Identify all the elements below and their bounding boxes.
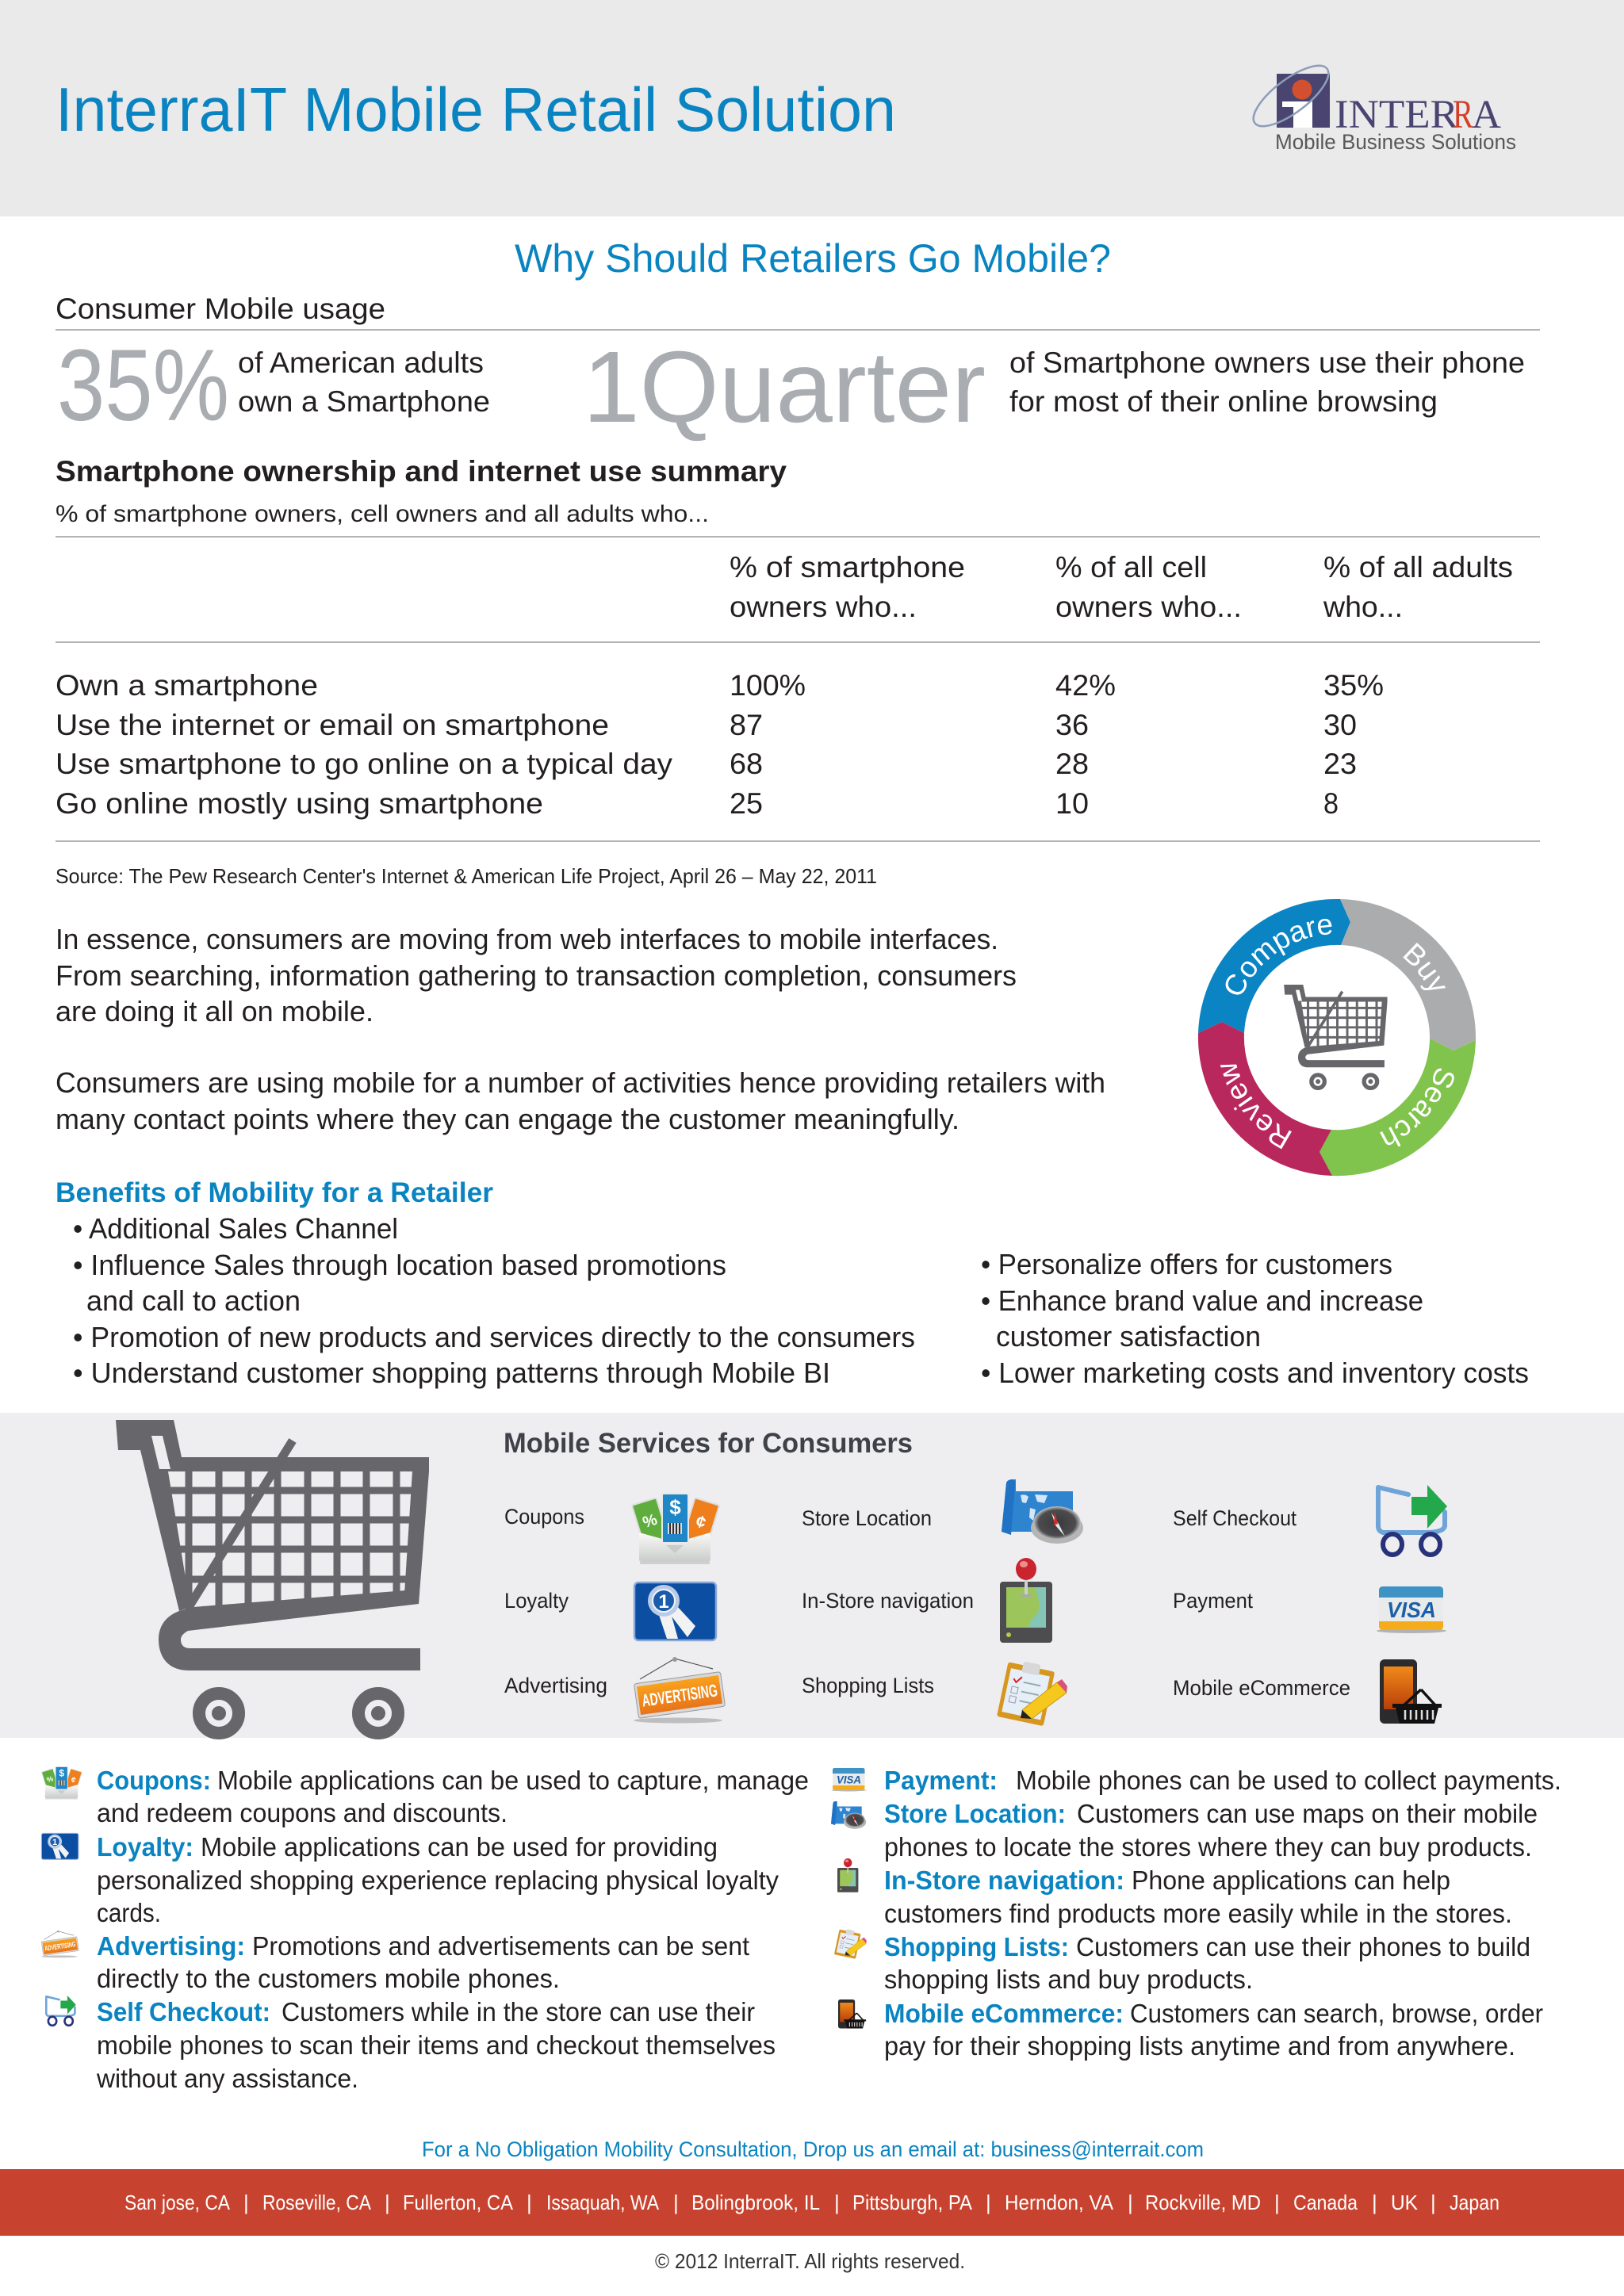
table rows: Use the internet or email on smartphone <box>56 709 609 741</box>
description: coupons: Coupons: <box>97 1766 211 1795</box>
description: mobile ecommerce: pay for their shopping lists anytime and from anywhere. <box>884 2031 1515 2061</box>
description: in-store navigation: Phone applications can help <box>1132 1866 1450 1895</box>
footer band: office locations: Japan <box>1450 2191 1500 2214</box>
table rows: 10 <box>1055 787 1089 820</box>
benefits list: left <box>73 1212 915 1389</box>
icon: cart in ring <box>1284 985 1388 1088</box>
service: advertising: Advertising <box>504 1674 607 1697</box>
footer band: office locations: | <box>1128 2191 1133 2214</box>
table rows: 30 <box>1323 709 1357 741</box>
table rows: 87 <box>730 709 763 741</box>
benefits list: left: • Understand customer shopping patterns through Mobile BI <box>73 1357 830 1389</box>
source note: Source: The Pew Research Center's Internet & American Life Project, April 26 – May 22, 2011 <box>56 864 877 888</box>
table rows: 28 <box>1055 748 1089 780</box>
description: advertising: Advertising: <box>97 1931 245 1961</box>
table rows: 8 <box>1323 787 1339 820</box>
description: store location <box>831 1799 1538 1862</box>
description: mobile ecommerce: Customers can search, browse, order <box>1130 1999 1543 2028</box>
description: store location: Customers can use maps on their mobile <box>1077 1799 1538 1828</box>
table rows <box>56 669 1384 820</box>
stat: 1 Quarter: of Smartphone owners use their phone <box>1009 346 1525 379</box>
stat: 35%: of American adults <box>238 346 484 379</box>
table heading: Smartphone ownership and internet use summary <box>56 455 787 488</box>
column headers: owners who... <box>730 591 917 623</box>
footer band: office locations: Bolingbrook, IL <box>691 2191 820 2214</box>
footer band: office locations: Roseville, CA <box>262 2191 372 2214</box>
service: loyalty: Loyalty <box>504 1589 569 1613</box>
column headers: % of smartphone <box>730 551 965 584</box>
service: advertising <box>504 1657 726 1724</box>
second paragraph <box>56 1066 1105 1135</box>
table subheading: % of smartphone owners, cell owners and all adults who... <box>56 501 709 527</box>
logo: Interra: R <box>1453 93 1473 137</box>
table rows: 36 <box>1055 709 1089 741</box>
footer band: office locations: | <box>673 2191 679 2214</box>
table rows: Use smartphone to go online on a typical day <box>56 748 673 780</box>
benefits list: left: • Influence Sales through location based promotions <box>73 1249 726 1281</box>
service: shopping lists: Shopping Lists <box>802 1674 934 1697</box>
benefits list: left: • Promotion of new products and services directly to the consumers <box>73 1321 915 1353</box>
segment: buy <box>1340 899 1476 1050</box>
icon: large shopping cart <box>116 1420 429 1733</box>
description: loyalty: cards. <box>97 1898 161 1927</box>
footer band: office locations: Canada <box>1293 2191 1358 2214</box>
table rows: Go online mostly using smartphone <box>56 787 543 820</box>
label: buy: Buy <box>1404 943 1446 990</box>
benefits list: left: • Additional Sales Channel <box>73 1212 398 1245</box>
benefits list: right <box>981 1248 1529 1389</box>
stat: 35%: 35% <box>57 329 229 442</box>
service: coupons: Coupons <box>504 1505 584 1529</box>
footer band: office locations: | <box>385 2191 390 2214</box>
service: self checkout: Self Checkout <box>1173 1506 1297 1530</box>
description: advertising: Promotions and advertisements can be sent <box>252 1931 749 1961</box>
subheading: consumer mobile usage: Consumer Mobile usage <box>56 293 385 325</box>
stat: 1 Quarter: 1Quarter <box>583 331 986 444</box>
description: self checkout <box>46 1996 776 2093</box>
table rows: 25 <box>730 787 763 820</box>
benefits list: right: • Lower marketing costs and inventory costs <box>981 1357 1529 1389</box>
description: loyalty <box>41 1832 779 1927</box>
description: mobile ecommerce <box>838 1999 1543 2061</box>
intro paragraph: In essence, consumers are moving from web interfaces to mobile interfaces. <box>56 923 998 955</box>
logo: Interra: INTER <box>1335 93 1458 137</box>
column headers: owners who... <box>1055 591 1242 623</box>
segment: review <box>1198 1022 1332 1176</box>
description: loyalty: personalized shopping experience replacing physical loyalty <box>97 1866 779 1895</box>
description: advertising <box>41 1931 749 1993</box>
description: self checkout: Self Checkout: <box>97 1997 270 2026</box>
second paragraph: Consumers are using mobile for a number of activities hence providing retailers with <box>56 1066 1105 1099</box>
description: shopping lists: shopping lists and buy products. <box>884 1965 1253 1994</box>
description: shopping lists <box>834 1927 1530 1994</box>
logo: Interra <box>1245 55 1516 154</box>
service: payment: Payment <box>1173 1589 1253 1613</box>
description: store location: phones to locate the stores where they can buy products. <box>884 1832 1532 1862</box>
description: loyalty: Mobile applications can be used for providing <box>201 1832 718 1862</box>
table rows: 100% <box>730 669 806 702</box>
table rows: 23 <box>1323 748 1357 780</box>
description: advertising: directly to the customers mobile phones. <box>97 1964 560 1993</box>
service: in-store navigation: In-Store navigation <box>802 1589 974 1613</box>
logo: Interra: A <box>1472 93 1501 137</box>
section heading: Why Should Retailers Go Mobile? <box>515 236 1111 281</box>
description: mobile ecommerce: Mobile eCommerce: <box>884 1999 1124 2028</box>
second paragraph: many contact points where they can engage the customer meaningfully. <box>56 1103 959 1135</box>
service: shopping lists <box>802 1658 1067 1726</box>
footer band: office locations: | <box>834 2191 840 2214</box>
footer band: office locations: San jose, CA <box>124 2191 231 2214</box>
description: in-store navigation: customers find products more easily while in the stores. <box>884 1899 1512 1928</box>
benefits list: right: • Enhance brand value and increase <box>981 1284 1423 1317</box>
service: coupons <box>504 1494 719 1564</box>
description: self checkout: Customers while in the store can use their <box>282 1997 755 2026</box>
description: loyalty: Loyalty: <box>97 1832 193 1862</box>
description: self checkout: without any assistance. <box>96 2064 358 2093</box>
intro paragraph <box>56 923 1017 1027</box>
service: mobile ecommerce <box>1173 1659 1442 1724</box>
footer band: office locations: Issaquah, WA <box>546 2191 660 2214</box>
benefits list: left: and call to action <box>86 1284 301 1317</box>
segment: search <box>1320 1039 1476 1176</box>
footer band: office locations: | <box>243 2191 249 2214</box>
service: mobile ecommerce: Mobile eCommerce <box>1173 1676 1350 1700</box>
stat: 35% <box>57 329 490 442</box>
stat: 1 Quarter: for most of their online browsing <box>1009 385 1438 418</box>
service: self checkout <box>1173 1485 1447 1555</box>
description: in-store navigation <box>837 1858 1512 1928</box>
intro paragraph: From searching, information gathering to transaction completion, consumers <box>56 959 1017 992</box>
footer band: office locations <box>0 2169 1624 2236</box>
column headers: % of all adults <box>1323 551 1513 584</box>
description: store location: Store Location: <box>884 1799 1066 1828</box>
service: loyalty <box>504 1582 716 1640</box>
title: InterraIT Mobile Retail Solution <box>56 75 896 144</box>
stat: 35%: own a Smartphone <box>238 385 490 418</box>
footer band: office locations: | <box>986 2191 991 2214</box>
footer band: office locations: | <box>1431 2191 1436 2214</box>
footer band: office locations: Pittsburgh, PA <box>852 2191 973 2214</box>
label: compare: Compare <box>1226 918 1332 995</box>
service: store location <box>802 1479 1083 1544</box>
service: in-store navigation <box>802 1558 1052 1643</box>
service: store location: Store Location <box>802 1506 932 1530</box>
footer band: office locations: | <box>527 2191 532 2214</box>
table rows: 42% <box>1055 669 1116 702</box>
benefits heading: Benefits of Mobility for a Retailer <box>56 1177 493 1208</box>
service: payment <box>1173 1586 1446 1633</box>
label: review: Review <box>1220 1064 1292 1150</box>
description: coupons: Mobile applications can be used to capture, manage <box>217 1766 809 1795</box>
description: payment: Mobile phones can be used to collect payments. <box>1016 1766 1561 1795</box>
footer band: office locations: Herndon, VA <box>1005 2191 1114 2214</box>
description: coupons: and redeem coupons and discounts. <box>97 1798 508 1827</box>
table rows: Own a smartphone <box>56 669 318 702</box>
column headers: % of all cell <box>1055 551 1207 584</box>
donut: shopping cycle <box>1197 899 1476 1177</box>
description: in-store navigation: In-Store navigation: <box>884 1866 1124 1895</box>
footer band: office locations: Rockville, MD <box>1145 2191 1261 2214</box>
table rows: 68 <box>730 748 763 780</box>
column headers <box>730 551 1513 623</box>
stat: 1 Quarter <box>583 331 1525 444</box>
description: coupons <box>42 1766 809 1827</box>
footer band: office locations: UK <box>1391 2191 1419 2214</box>
copyright: © 2012 InterraIT. All rights reserved. <box>655 2249 965 2273</box>
description: self checkout: mobile phones to scan their items and checkout themselves <box>97 2030 776 2060</box>
description: shopping lists: Shopping Lists: <box>884 1932 1069 1961</box>
panel heading: Mobile Services for Consumers <box>504 1428 913 1459</box>
footer band: office locations: | <box>1372 2191 1377 2214</box>
description: payment: Payment: <box>884 1766 998 1795</box>
table: smartphone ownership <box>56 551 1540 820</box>
label: search: Search <box>1380 1069 1454 1146</box>
column headers: who... <box>1323 591 1403 623</box>
panel: mobile services for consumers <box>0 1413 1624 1738</box>
footer band: office locations: | <box>1274 2191 1280 2214</box>
logo: Interra: Mobile Business Solutions <box>1275 130 1516 154</box>
benefits list: right: customer satisfaction <box>996 1320 1261 1353</box>
benefits list: right: • Personalize offers for customers <box>981 1248 1392 1280</box>
header band <box>0 0 1624 216</box>
call to action: For a No Obligation Mobility Consultation, Drop us an email at: business@interrait.com <box>422 2137 1204 2161</box>
description: shopping lists: Customers can use their phones to build <box>1076 1932 1530 1961</box>
footer band: office locations: Fullerton, CA <box>403 2191 514 2214</box>
table rows: 35% <box>1323 669 1384 702</box>
intro paragraph: are doing it all on mobile. <box>56 995 373 1027</box>
segment: compare <box>1198 899 1350 1033</box>
